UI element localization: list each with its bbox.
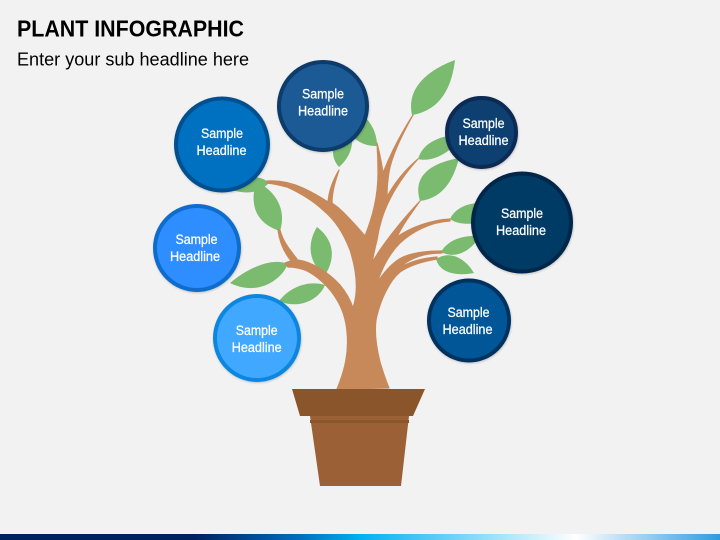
circle: upper left <box>176 98 268 190</box>
circle: upper right: Sample <box>462 116 504 131</box>
circle: upper left: Headline <box>196 143 246 158</box>
footer gradient bar <box>0 534 720 540</box>
circle: lower right: Headline <box>442 322 492 337</box>
plant leaves <box>230 60 480 304</box>
circle: lower left <box>215 296 299 380</box>
circle: middle left: Headline <box>170 249 220 264</box>
circle: lower right <box>429 280 509 360</box>
circle: middle right large <box>473 174 571 272</box>
plant pot <box>292 389 425 486</box>
circle: lower left: Sample <box>236 323 278 338</box>
circle: top centre: Sample <box>302 86 344 102</box>
circle: middle right large: Sample <box>501 206 543 221</box>
subtitle: Enter your sub headline here <box>17 50 249 70</box>
circle: upper left: Sample <box>201 126 243 141</box>
title: PLANT INFOGRAPHIC <box>17 16 244 42</box>
circle: middle right large: Headline <box>496 223 546 238</box>
plant trunk and branches <box>267 115 450 389</box>
circle: middle left: Sample <box>176 232 218 247</box>
circle: upper right <box>447 98 516 167</box>
circle: lower right: Sample <box>448 305 490 320</box>
circle: upper right: Headline <box>458 133 508 148</box>
circle: top centre <box>279 62 367 150</box>
circle: lower left: Headline <box>232 340 282 355</box>
circle: middle left <box>155 206 239 290</box>
circle: top centre: Headline <box>298 104 348 118</box>
